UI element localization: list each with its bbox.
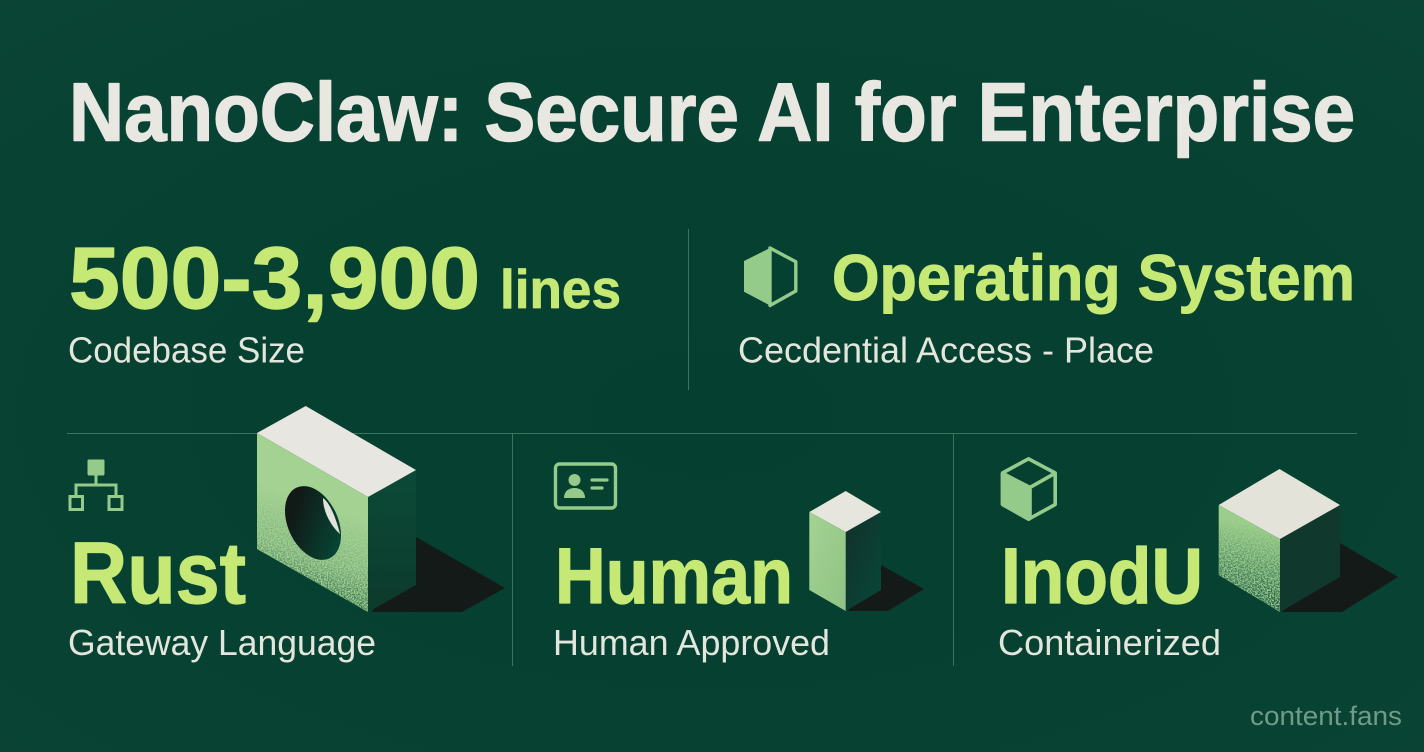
illustration: tall block — [809, 491, 924, 611]
stat: operating system — [738, 241, 1355, 370]
label: credential access: Cecdential Access - Place — [738, 330, 1154, 370]
value: inodu: InodU — [1001, 531, 1203, 620]
label: gateway language: Gateway Language — [68, 622, 376, 663]
value: operating system: Operating System — [832, 241, 1355, 314]
value: rust: Rust — [70, 525, 246, 622]
value: 500-3,900 lines: lines — [500, 258, 621, 320]
panel: rust — [68, 406, 505, 663]
label: codebase size: Codebase Size — [68, 330, 305, 370]
icon: half-filled hexagon — [744, 248, 796, 306]
icon: id card — [556, 464, 616, 508]
label: containerized: Containerized — [998, 622, 1221, 663]
icon: network hierarchy — [70, 460, 122, 510]
stat: codebase size — [68, 230, 621, 370]
illustration: cube — [1219, 469, 1398, 612]
icon: cube — [1001, 459, 1056, 521]
value: human: Human — [555, 531, 793, 620]
panel: container — [998, 459, 1398, 663]
value: 500-3,900 lines: 500-3,900 — [69, 230, 480, 327]
label: human approved: Human Approved — [553, 622, 830, 663]
illustration: block with hole — [257, 406, 505, 612]
watermark: content.fans — [1250, 701, 1402, 731]
panel: human — [553, 464, 924, 663]
